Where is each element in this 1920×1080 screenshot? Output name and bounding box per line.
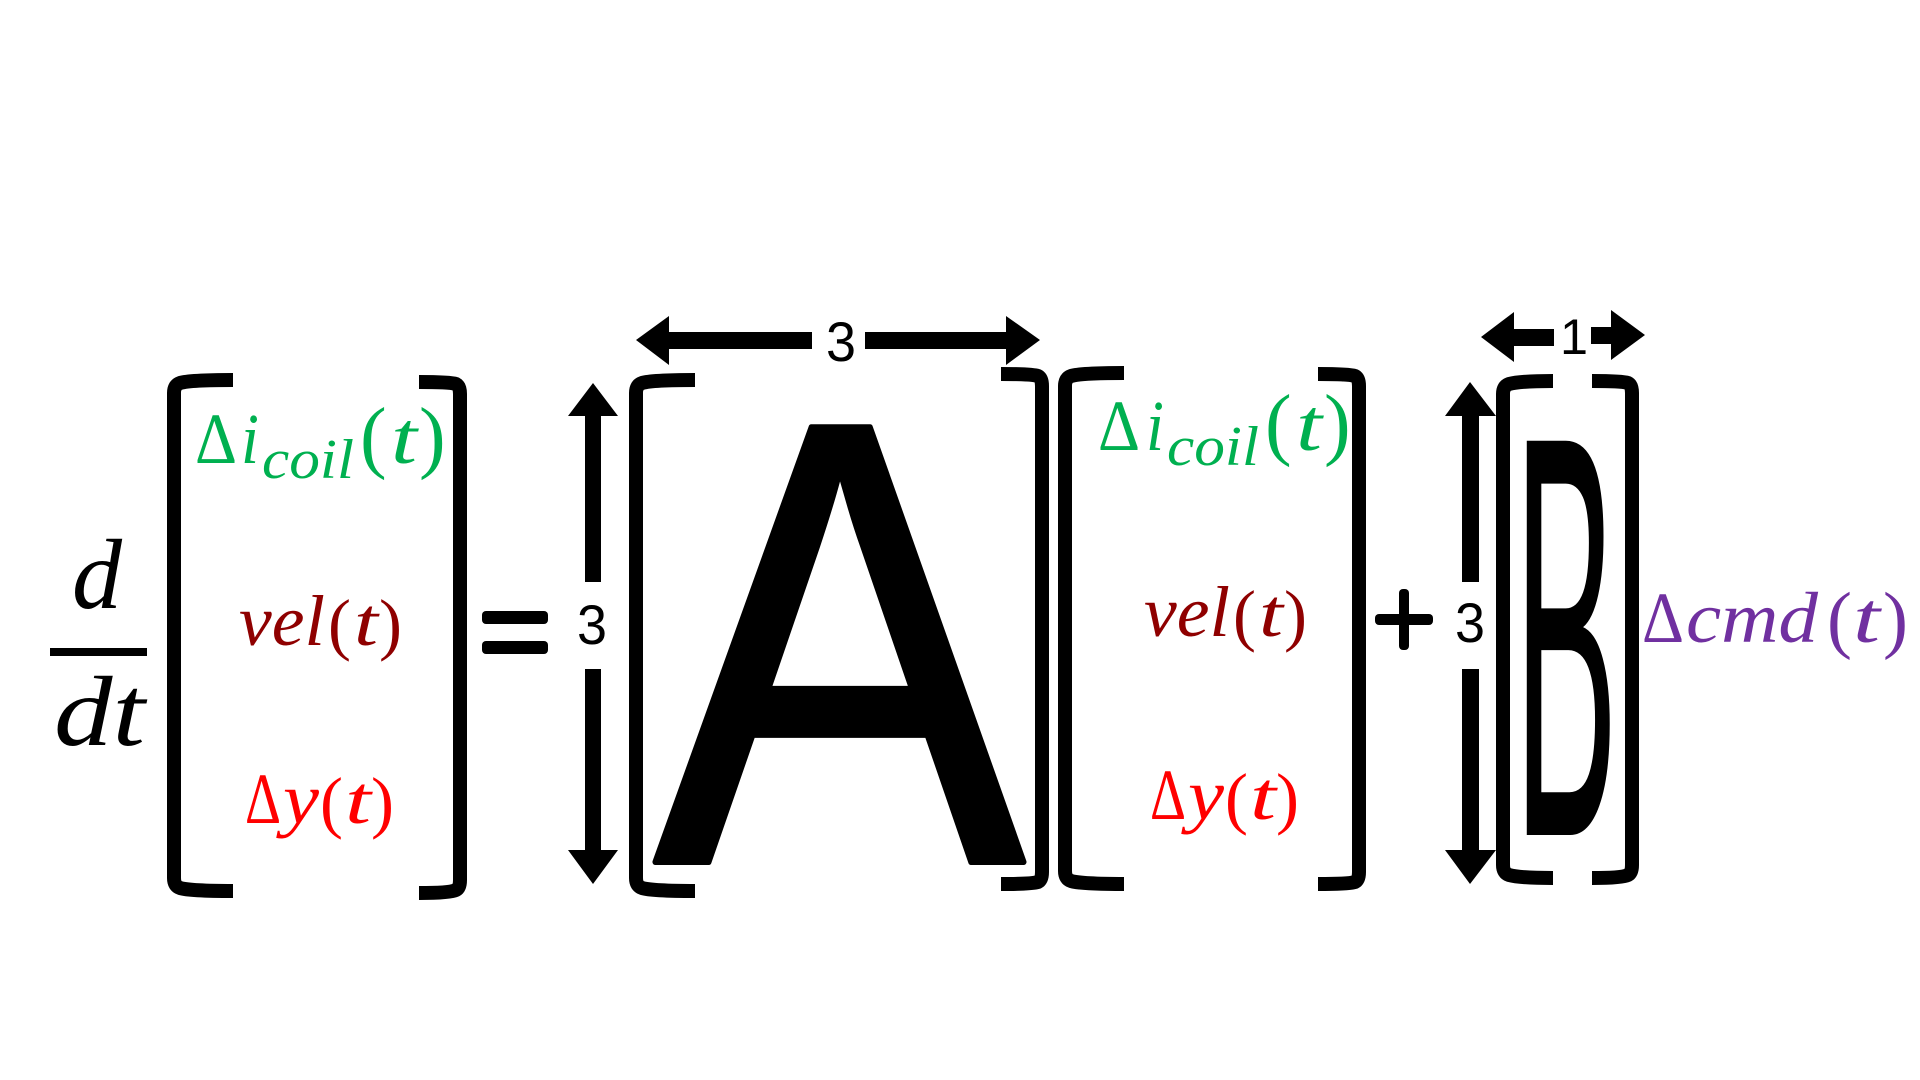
state entry: position: y xyxy=(275,759,319,839)
plus sign xyxy=(1375,589,1433,650)
right bracket of state vector xyxy=(419,382,460,893)
second state entry: coil current xyxy=(1098,380,1351,478)
dimension arrow: A columns xyxy=(636,310,1040,373)
state entry: position xyxy=(245,759,394,840)
second state entry: coil current: i xyxy=(1146,386,1164,466)
state entry: coil current: ) xyxy=(419,393,446,481)
dimension arrow: B rows xyxy=(1445,382,1496,884)
label: 3: 3 xyxy=(1455,591,1485,654)
second state entry: position xyxy=(1150,755,1299,836)
input entry: command: ) xyxy=(1883,578,1908,661)
left bracket of matrix B xyxy=(1503,381,1553,878)
second state entry: velocity: ( xyxy=(1233,577,1256,653)
second state entry: coil current: coil xyxy=(1167,416,1259,478)
matrix B letter: B xyxy=(1514,316,1618,956)
second state entry: velocity: ) xyxy=(1284,577,1307,653)
second state entry: velocity: vel xyxy=(1144,572,1230,652)
state entry: velocity: ) xyxy=(379,586,402,662)
second state entry: position: t xyxy=(1250,758,1279,834)
dimension arrow: A rows xyxy=(568,383,618,884)
state entry: coil current: ( xyxy=(360,393,387,481)
second state entry: position: y xyxy=(1180,755,1224,835)
label: 3: 3 xyxy=(577,593,607,656)
input entry: command: Δ xyxy=(1642,578,1684,658)
second state entry: coil current: ( xyxy=(1265,380,1292,468)
state entry: position: Δ xyxy=(245,759,281,839)
second state entry: velocity xyxy=(1144,572,1307,653)
state entry: position: ) xyxy=(371,764,394,840)
state entry: coil current: i xyxy=(241,399,259,479)
second state entry: coil current: Δ xyxy=(1098,386,1140,466)
left bracket of matrix A xyxy=(636,380,695,891)
input entry: command: cmd xyxy=(1686,578,1819,658)
derivative operator d/dt xyxy=(50,519,148,767)
left bracket of state vector xyxy=(174,380,233,891)
right bracket of matrix A xyxy=(1001,374,1042,884)
second state entry: velocity: t xyxy=(1259,575,1286,651)
left bracket of second state vector xyxy=(1065,373,1124,884)
second state entry: coil current: t xyxy=(1296,385,1325,467)
state entry: velocity: t xyxy=(354,584,381,660)
label: 1: 1 xyxy=(1560,309,1588,365)
equals sign xyxy=(482,611,548,654)
state entry: velocity: ( xyxy=(328,586,351,662)
state entry: coil current: Δ xyxy=(195,399,237,479)
state entry: velocity xyxy=(239,581,402,662)
state entry: coil current: t xyxy=(391,398,420,480)
derivative operator d/dt: dt xyxy=(54,656,148,767)
matrix A letter: A xyxy=(654,291,1028,997)
state entry: position: ( xyxy=(320,764,343,840)
right bracket of second state vector xyxy=(1318,374,1359,884)
state entry: position: t xyxy=(345,762,374,838)
input entry: command: ( xyxy=(1827,578,1852,661)
input entry: command: t xyxy=(1853,578,1883,658)
second state entry: position: ( xyxy=(1225,760,1248,836)
right bracket of matrix B xyxy=(1592,381,1632,878)
label: 3: 3 xyxy=(826,310,856,373)
state entry: coil current xyxy=(195,393,446,491)
state entry: coil current: coil xyxy=(262,429,354,491)
derivative operator d/dt: d xyxy=(72,519,123,630)
dimension arrow: B columns xyxy=(1481,309,1645,365)
second state entry: coil current: ) xyxy=(1324,380,1351,468)
state entry: velocity: vel xyxy=(239,581,325,661)
second state entry: position: Δ xyxy=(1150,755,1186,835)
input entry: command xyxy=(1642,578,1908,661)
second state entry: position: ) xyxy=(1276,760,1299,836)
